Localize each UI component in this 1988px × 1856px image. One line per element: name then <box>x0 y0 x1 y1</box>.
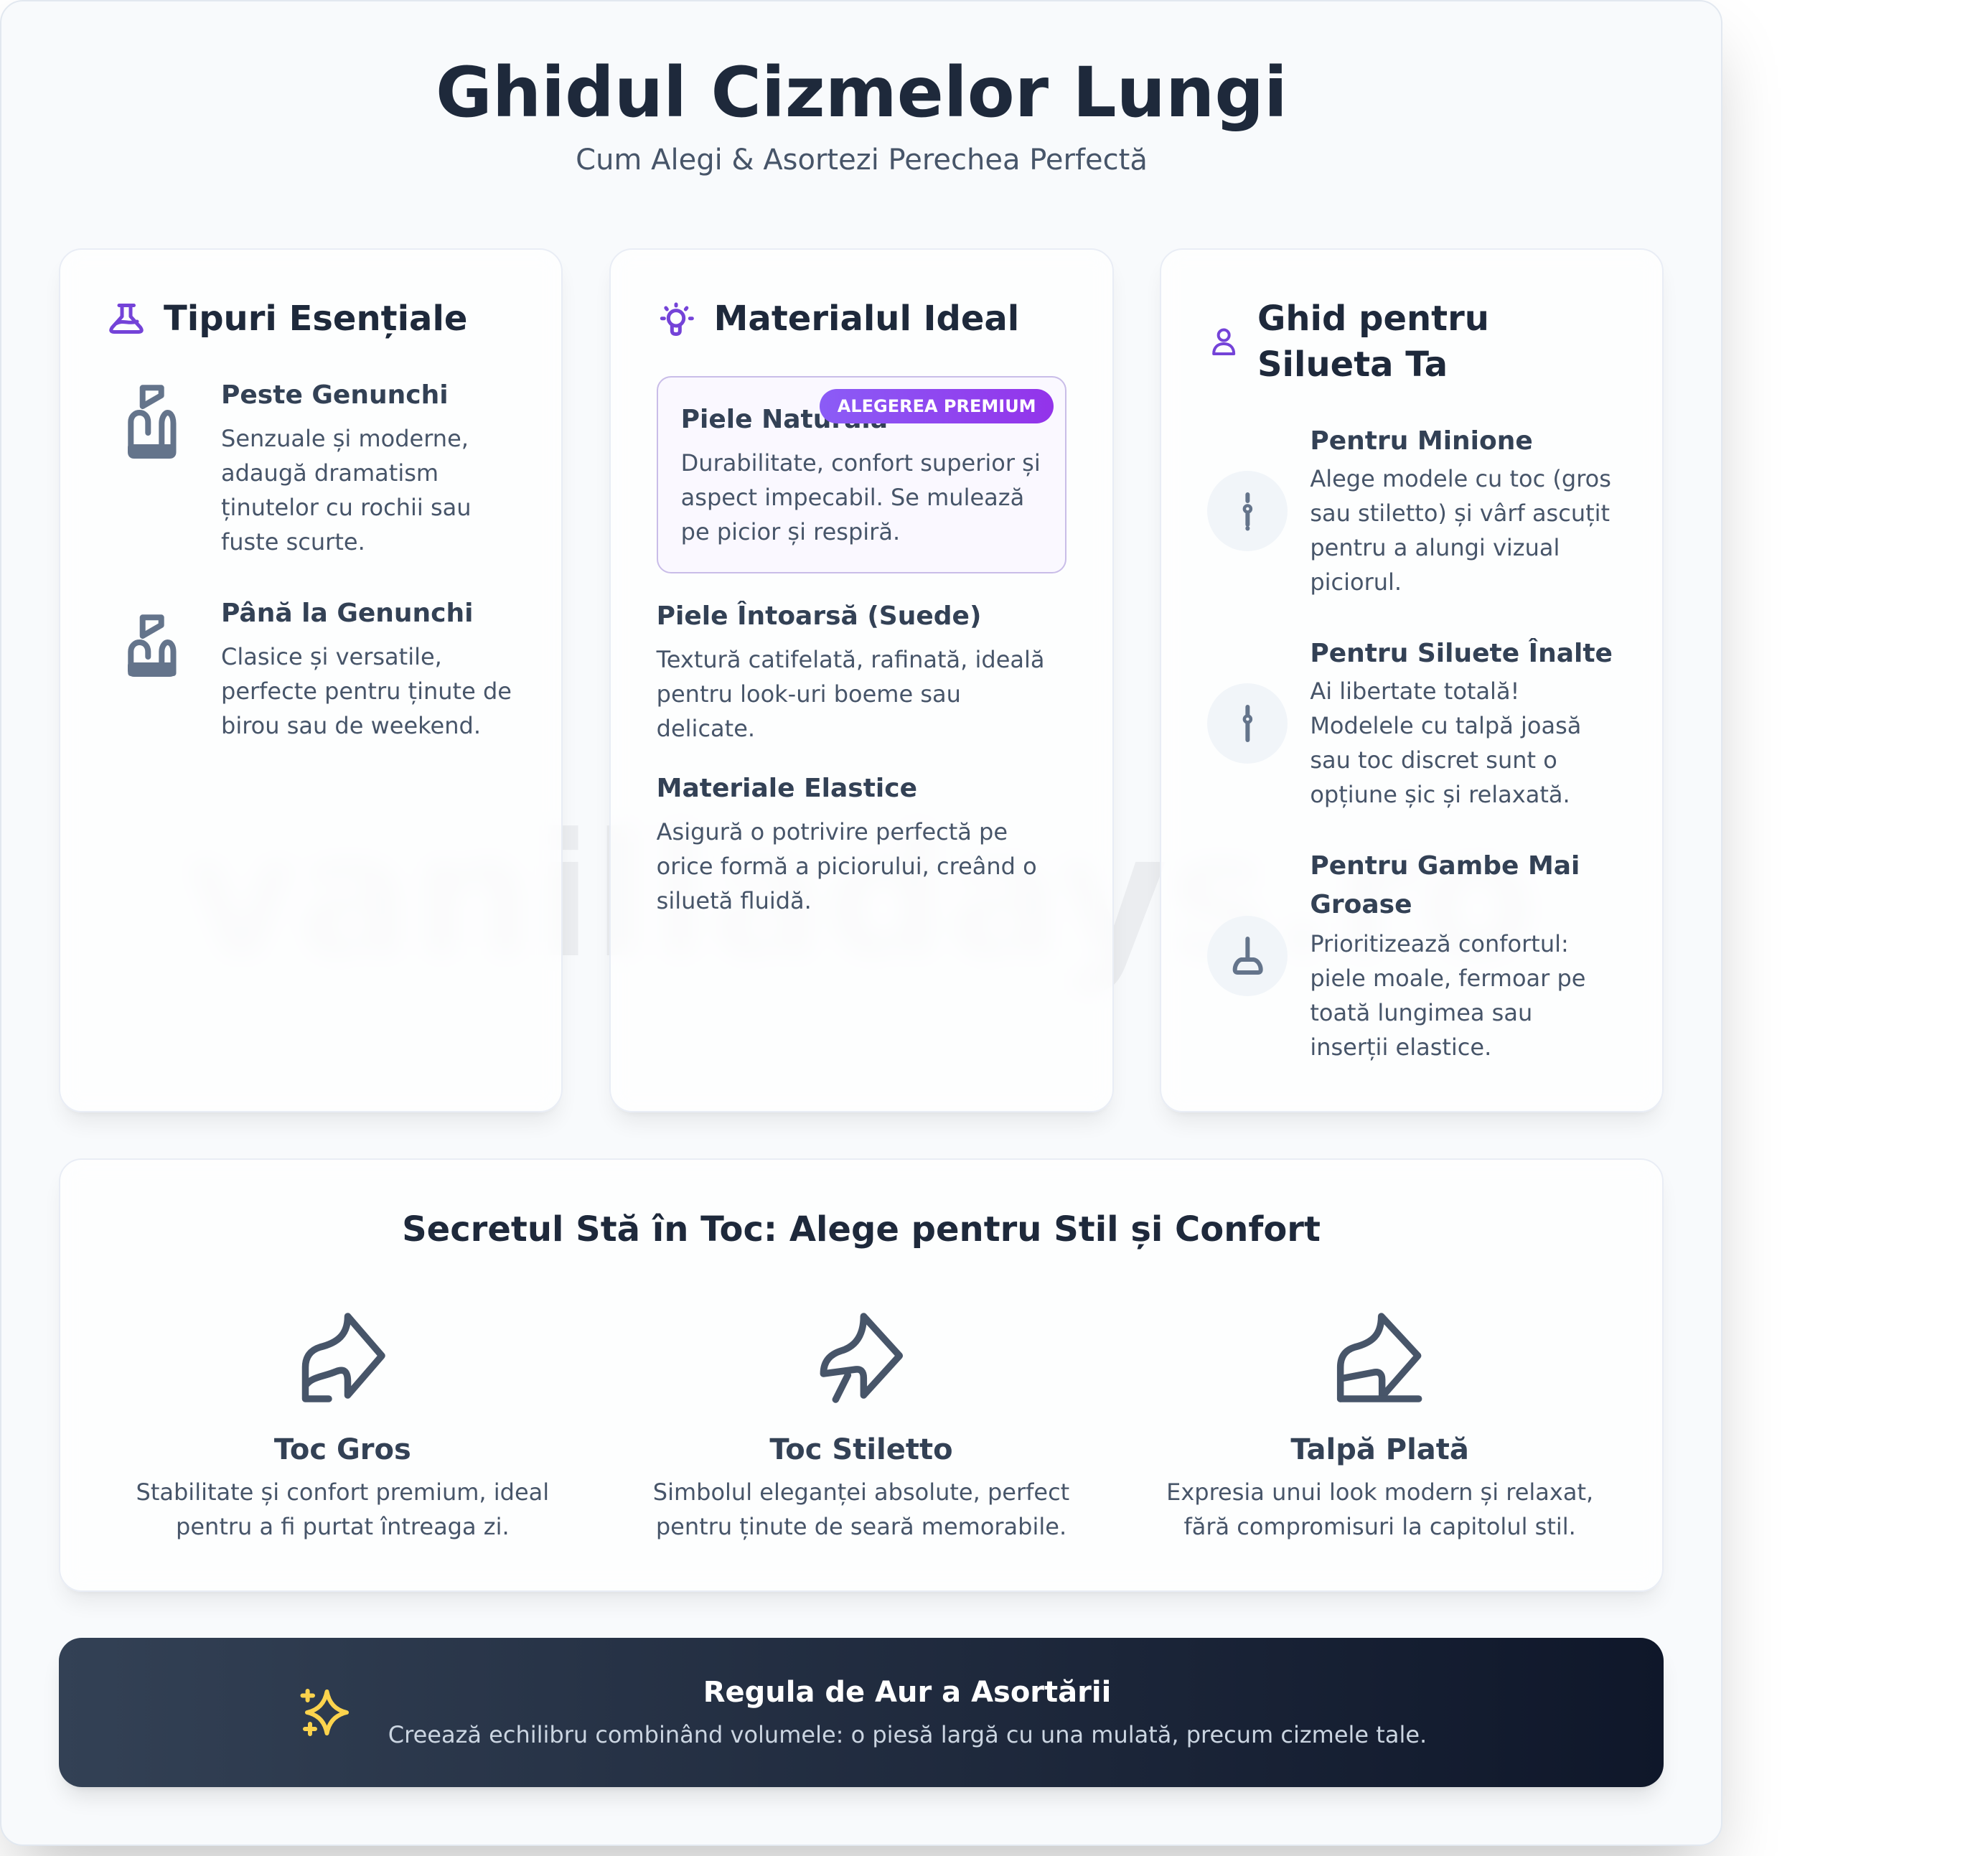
item text: fuste scurte. <box>221 528 365 556</box>
item text: Modelele cu talpă joasă <box>1310 712 1581 739</box>
column heading: Talpă Plată <box>1290 1433 1469 1466</box>
item text: pentru a alungi vizual <box>1310 534 1560 561</box>
banner: regula de aur <box>59 1638 1664 1787</box>
icon: boot tall <box>128 385 177 459</box>
column text: Simbolul eleganței absolute, perfect <box>653 1478 1069 1506</box>
item heading: Piele Întoarsă (Suede) <box>657 601 981 631</box>
item text: Durabilitate, confort superior și <box>681 449 1041 477</box>
icon: person <box>1212 329 1236 355</box>
item text: Textură catifelată, rafinată, ideală <box>657 646 1045 673</box>
column text: pentru ținute de seară memorabile. <box>656 1513 1066 1540</box>
item text: Clasice și versatile, <box>221 643 442 670</box>
item text: toată lungimea sau <box>1310 999 1532 1026</box>
text: pentru minione <box>1310 426 1611 596</box>
icon: sparkles <box>300 1689 349 1736</box>
item text: Prioritizează confortul: <box>1310 930 1569 957</box>
item: circle icon minione <box>1207 471 1288 551</box>
item text: ținutelor cu rochii sau <box>221 494 471 521</box>
item text: piciorul. <box>1310 568 1402 596</box>
column text <box>136 1478 549 1540</box>
item text: siluetă fluidă. <box>657 887 812 914</box>
text: pentru gambe <box>1310 851 1585 1061</box>
item text <box>656 818 1037 914</box>
item heading: Pentru Minione <box>1310 426 1533 456</box>
column text: Expresia unui look modern și relaxat, <box>1166 1478 1593 1506</box>
icon: boot knee <box>128 614 177 677</box>
column: toc stiletto <box>653 1313 1069 1540</box>
panel: ghid pentru silueta <box>1160 248 1664 1112</box>
panel: materialul ideal <box>609 248 1114 1112</box>
item text: Ai libertate totală! <box>1310 678 1519 705</box>
column text: fără compromisuri la capitolul stil. <box>1183 1513 1576 1540</box>
column text <box>1166 1478 1593 1540</box>
column heading: Toc Stiletto <box>769 1433 953 1466</box>
item text <box>221 425 471 556</box>
badge <box>820 389 1054 423</box>
heading: ghid pentru silueta <box>1257 299 1489 385</box>
text: materiale elastice <box>656 774 1037 914</box>
item text: Senzuale și moderne, <box>221 425 469 452</box>
text: pentru siluete inalte <box>1310 638 1613 808</box>
item heading <box>1310 851 1580 919</box>
heading: ghid pentru silueta: Ghid pentru <box>1257 299 1489 339</box>
item text: sau stiletto) și vârf ascuțit <box>1310 500 1610 527</box>
item text: perfecte pentru ținute de <box>221 678 512 705</box>
heading: materialul ideal: Materialul Ideal <box>714 299 1019 339</box>
item text <box>1310 678 1581 808</box>
item text: piele moale, fermoar pe <box>1310 965 1585 992</box>
heading: tipuri esentiale: Tipuri Esențiale <box>164 299 467 339</box>
heading: ghid pentru silueta: Silueta Ta <box>1257 345 1448 385</box>
subtitle: Cum Alegi & Asortezi Perechea Perfectă <box>576 144 1148 177</box>
item text <box>1310 930 1585 1061</box>
item text: aspect impecabil. Se mulează <box>681 484 1024 511</box>
icon: wide boot <box>1233 937 1263 975</box>
item text: adaugă dramatism <box>221 459 439 487</box>
banner heading: Regula de Aur a Asortării <box>703 1676 1111 1709</box>
item text: birou sau de weekend. <box>221 712 481 739</box>
item heading: Până la Genunchi <box>221 599 474 628</box>
panel: tipuri esentiale <box>59 248 563 1112</box>
item: circle icon gambe <box>1207 916 1288 996</box>
item text <box>1310 465 1611 596</box>
title: Ghidul Cizmelor Lungi <box>436 52 1288 133</box>
item text: orice formă a piciorului, creând o <box>657 853 1037 880</box>
icon: low heel <box>1243 705 1253 742</box>
icon: block heel <box>301 1313 385 1402</box>
item text: opțiune șic și relaxată. <box>1310 781 1570 808</box>
item text: sau toc discret sunt o <box>1310 746 1557 774</box>
highlight: piele naturala <box>657 376 1066 573</box>
item heading: Pentru Siluete Înalte <box>1310 639 1613 667</box>
item text: pentru look-uri boeme sau <box>657 680 961 708</box>
item heading: Peste Genunchi <box>221 380 449 410</box>
item text: Alege modele cu toc (gros <box>1310 465 1611 492</box>
column: talpa plata <box>1166 1313 1593 1540</box>
item heading: Piele Naturală <box>681 405 888 433</box>
icon: slim heel <box>1243 492 1253 531</box>
icon: light bulb <box>660 303 694 336</box>
item heading: Groase <box>1310 890 1412 919</box>
column: toc gros <box>136 1313 549 1540</box>
column text: Stabilitate și confort premium, ideal <box>136 1478 549 1506</box>
badge: ALEGEREA PREMIUM <box>838 396 1036 416</box>
icon: flask <box>109 304 144 334</box>
watermark: vanilladays.ro <box>186 797 1537 996</box>
banner text: Creează echilibru combinând volumele: o piesă largă cu una mulată, precum cizmele tale. <box>388 1721 1427 1748</box>
heading: secretul sta in toc: Secretul Stă în Toc: Alege pentru Stil și Confort <box>402 1209 1321 1249</box>
item text <box>221 643 512 739</box>
item text: Asigură o potrivire perfectă pe <box>657 818 1008 845</box>
text: pana la genunchi <box>221 599 512 739</box>
item text <box>681 449 1041 545</box>
panel: secretul sta in toc <box>59 1158 1664 1592</box>
item text: pe picior și respiră. <box>681 518 900 545</box>
column heading: Toc Gros <box>274 1433 411 1466</box>
item heading: Pentru Gambe Mai <box>1310 851 1580 880</box>
icon: flat sole <box>1336 1313 1422 1402</box>
item heading: Materiale Elastice <box>657 774 917 803</box>
column text <box>653 1478 1069 1540</box>
item: circle icon inalte <box>1207 683 1288 764</box>
item text: delicate. <box>657 715 755 742</box>
text: peste genunchi <box>221 380 471 556</box>
column text: pentru a fi purtat întreaga zi. <box>176 1513 510 1540</box>
item text <box>656 646 1045 742</box>
text: piele intoarsa <box>656 601 1045 742</box>
icon: stiletto heel <box>820 1313 903 1403</box>
item text: inserții elastice. <box>1310 1034 1491 1061</box>
